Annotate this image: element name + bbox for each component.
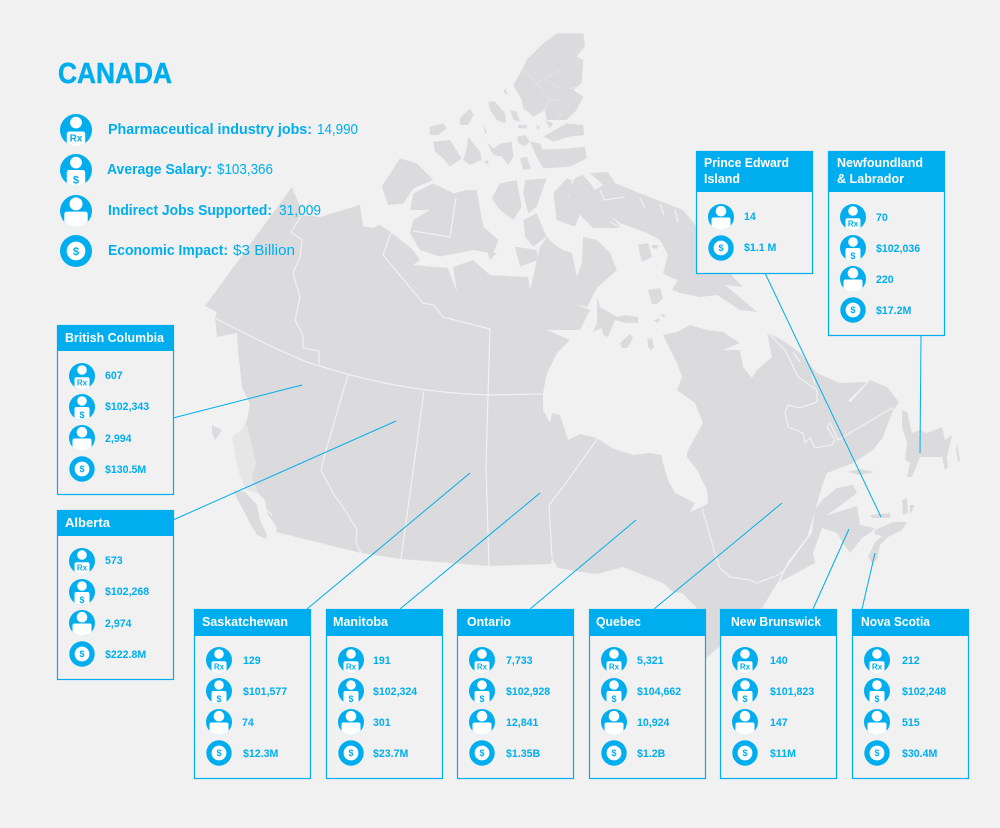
heading: Nova Scotia: Nova Scotia <box>861 614 931 629</box>
panel: Manitoba: 301 <box>373 717 391 729</box>
average salary stat: $103,366 <box>217 161 273 178</box>
panel: Quebec: $ <box>611 748 617 758</box>
heading: Prince Edward Island <box>704 155 789 186</box>
heading: New Brunswick: New Brunswick <box>731 614 822 629</box>
panel: Quebec: 5,321 <box>637 655 664 667</box>
panel: Saskatchewan: $ <box>216 748 222 758</box>
heading: Quebec: Quebec <box>596 614 641 629</box>
panel: New Brunswick: $ <box>742 694 748 704</box>
panel: Newfoundland & Labrador: $17.2M <box>876 305 912 317</box>
Anticosti <box>847 469 875 475</box>
panel: Quebec: $ <box>611 694 617 704</box>
economic impact stat: Economic Impact: <box>108 242 228 259</box>
panel: Newfoundland & Labrador: 220 <box>876 274 894 286</box>
panel: Nova Scotia: Rx <box>872 662 883 672</box>
panel: Manitoba: $102,324 <box>373 686 417 698</box>
heading: Ontario: Ontario <box>467 614 511 629</box>
panel: Alberta <box>57 510 174 680</box>
Nova Scotia <box>868 522 907 563</box>
panel: Manitoba: $ <box>348 694 354 704</box>
panel: Ontario: 7,733 <box>506 655 533 667</box>
panel: Nova Scotia: $ <box>874 694 880 704</box>
panel: Ontario: $ <box>479 694 485 704</box>
national summary <box>60 114 358 267</box>
panel: Newfoundland & Labrador: Rx <box>848 220 859 228</box>
leader line: Prince Edward Island <box>765 273 881 517</box>
economic impact stat: $3 Billion <box>233 242 295 259</box>
panel: British Columbia <box>57 325 174 494</box>
icon: economic impact <box>60 235 92 267</box>
panel: Alberta: Rx <box>77 564 88 572</box>
panel: Quebec: $1.2B <box>637 748 666 760</box>
Newfoundland <box>902 410 952 477</box>
map of Canada <box>205 33 960 658</box>
indirect jobs stat: Indirect Jobs Supported: <box>108 202 272 219</box>
indirect jobs stat: 31,009 <box>279 202 321 219</box>
heading: British Columbia: British Columbia <box>65 330 165 345</box>
panel: Saskatchewan: 74 <box>242 717 254 729</box>
panel: Saskatchewan: $ <box>216 694 222 704</box>
panel: Alberta: $ <box>79 595 85 605</box>
average salary stat <box>107 161 273 178</box>
panel: Quebec <box>589 609 706 778</box>
panel: Quebec: 10,924 <box>637 717 670 729</box>
panel: Saskatchewan: Rx <box>214 662 225 672</box>
panel: Saskatchewan: $101,577 <box>243 686 287 698</box>
panel: Manitoba: $23.7M <box>373 748 409 760</box>
pharmaceutical jobs stat: Pharmaceutical industry jobs: <box>108 121 312 138</box>
panel: Manitoba: $ <box>348 748 354 758</box>
title: CANADA <box>58 58 172 90</box>
panel: British Columbia: $130.5M <box>105 464 146 476</box>
leader line: Nova Scotia <box>862 553 875 609</box>
leader line: Newfoundland <box>920 335 921 453</box>
panel: Ontario: $1.35B <box>506 748 541 760</box>
New Brunswick <box>822 506 875 553</box>
heading: Newfoundland & Labrador: & Labrador <box>837 171 904 186</box>
panel: New Brunswick <box>720 609 837 778</box>
icon: economic impact: $ <box>73 246 80 258</box>
panel: New Brunswick: Rx <box>740 662 751 672</box>
Baffin Island <box>568 172 757 312</box>
panel: Prince Edward Island <box>696 151 813 274</box>
panel: Nova Scotia <box>852 609 969 778</box>
panel: British Columbia: $ <box>79 464 85 474</box>
heading: Prince Edward Island: Prince Edward <box>704 155 789 170</box>
panel: Prince Edward Island: $1.1 M <box>744 242 777 254</box>
panel: Saskatchewan: $12.3M <box>243 748 279 760</box>
panel: Newfoundland & Labrador: $102,036 <box>876 243 920 255</box>
panel: Alberta: $102,268 <box>105 586 149 598</box>
panel: Manitoba <box>326 609 443 778</box>
economic impact stat <box>108 242 295 259</box>
average salary stat: Average Salary: <box>107 161 212 178</box>
panel: British Columbia: $ <box>79 410 85 420</box>
panel: Alberta: $222.8M <box>105 649 146 661</box>
panel: Newfoundland & Labrador: 70 <box>876 212 888 224</box>
panel: Newfoundland & Labrador: $ <box>850 305 856 315</box>
BC islands <box>233 490 267 539</box>
heading: Saskatchewan: Saskatchewan <box>202 614 288 629</box>
panel: Ontario: 12,841 <box>506 717 539 729</box>
leader line: Quebec <box>654 503 782 609</box>
panel: Prince Edward Island: $ <box>718 243 724 253</box>
panel: British Columbia: Rx <box>77 378 88 388</box>
panel: Saskatchewan <box>194 609 311 778</box>
panel: Nova Scotia: 212 <box>902 655 920 667</box>
icon: average salary: $ <box>73 175 79 187</box>
Gaspe and Maine <box>780 485 857 582</box>
panel: Ontario: Rx <box>477 662 488 672</box>
heading: Prince Edward Island: Island <box>704 171 740 186</box>
panel: British Columbia: $102,343 <box>105 401 149 413</box>
panel: New Brunswick: $ <box>742 748 748 758</box>
panel: Alberta: $ <box>79 649 85 659</box>
panel: Quebec: $104,662 <box>637 686 681 698</box>
heading: Newfoundland & Labrador: Newfoundland <box>837 155 923 170</box>
leader line: Ontario <box>530 520 636 609</box>
leader line: Alberta <box>173 421 396 520</box>
panel: Nova Scotia: $102,248 <box>902 686 946 698</box>
panel: Ontario <box>457 609 574 778</box>
panel: British Columbia: 607 <box>105 370 123 382</box>
heading: Alberta: Alberta <box>65 515 111 530</box>
panel: Quebec: Rx <box>609 662 620 672</box>
panel: New Brunswick: 147 <box>770 717 788 729</box>
panel: Newfoundland & Labrador <box>828 151 945 336</box>
icon: pharmaceutical jobs <box>60 114 92 149</box>
icon: average salary <box>60 154 92 187</box>
panel: New Brunswick: $11M <box>770 748 796 760</box>
fjords <box>523 47 585 120</box>
panel: New Brunswick: $101,823 <box>770 686 814 698</box>
leader line: New Brunswick <box>813 529 849 609</box>
panel: Ontario: $102,928 <box>506 686 550 698</box>
panel: Ontario: $ <box>479 748 485 758</box>
leader line: British Columbia <box>173 385 302 418</box>
leader line: Saskatchewan <box>307 473 470 609</box>
panel: Manitoba: 191 <box>373 655 391 667</box>
panel: Alberta: 2,974 <box>105 618 132 630</box>
heading: Manitoba: Manitoba <box>333 614 389 629</box>
panel: Nova Scotia: $ <box>874 748 880 758</box>
heading: Newfoundland & Labrador <box>837 155 923 186</box>
panel: Nova Scotia: $30.4M <box>902 748 938 760</box>
leader line: Manitoba <box>400 493 540 609</box>
panel: Newfoundland & Labrador: $ <box>850 251 856 261</box>
icon: indirect jobs <box>60 195 92 229</box>
panel: Manitoba: Rx <box>346 662 357 672</box>
panel: British Columbia: 2,994 <box>105 433 132 445</box>
panel: Saskatchewan: 129 <box>243 655 261 667</box>
panel: Prince Edward Island: 14 <box>744 211 756 223</box>
panel: Alberta: 573 <box>105 555 123 567</box>
pharmaceutical jobs stat: 14,990 <box>317 121 358 138</box>
provincial borders <box>215 198 895 583</box>
panel: Nova Scotia: 515 <box>902 717 920 729</box>
icon: pharmaceutical jobs: Rx <box>70 134 83 145</box>
panel: New Brunswick: 140 <box>770 655 788 667</box>
